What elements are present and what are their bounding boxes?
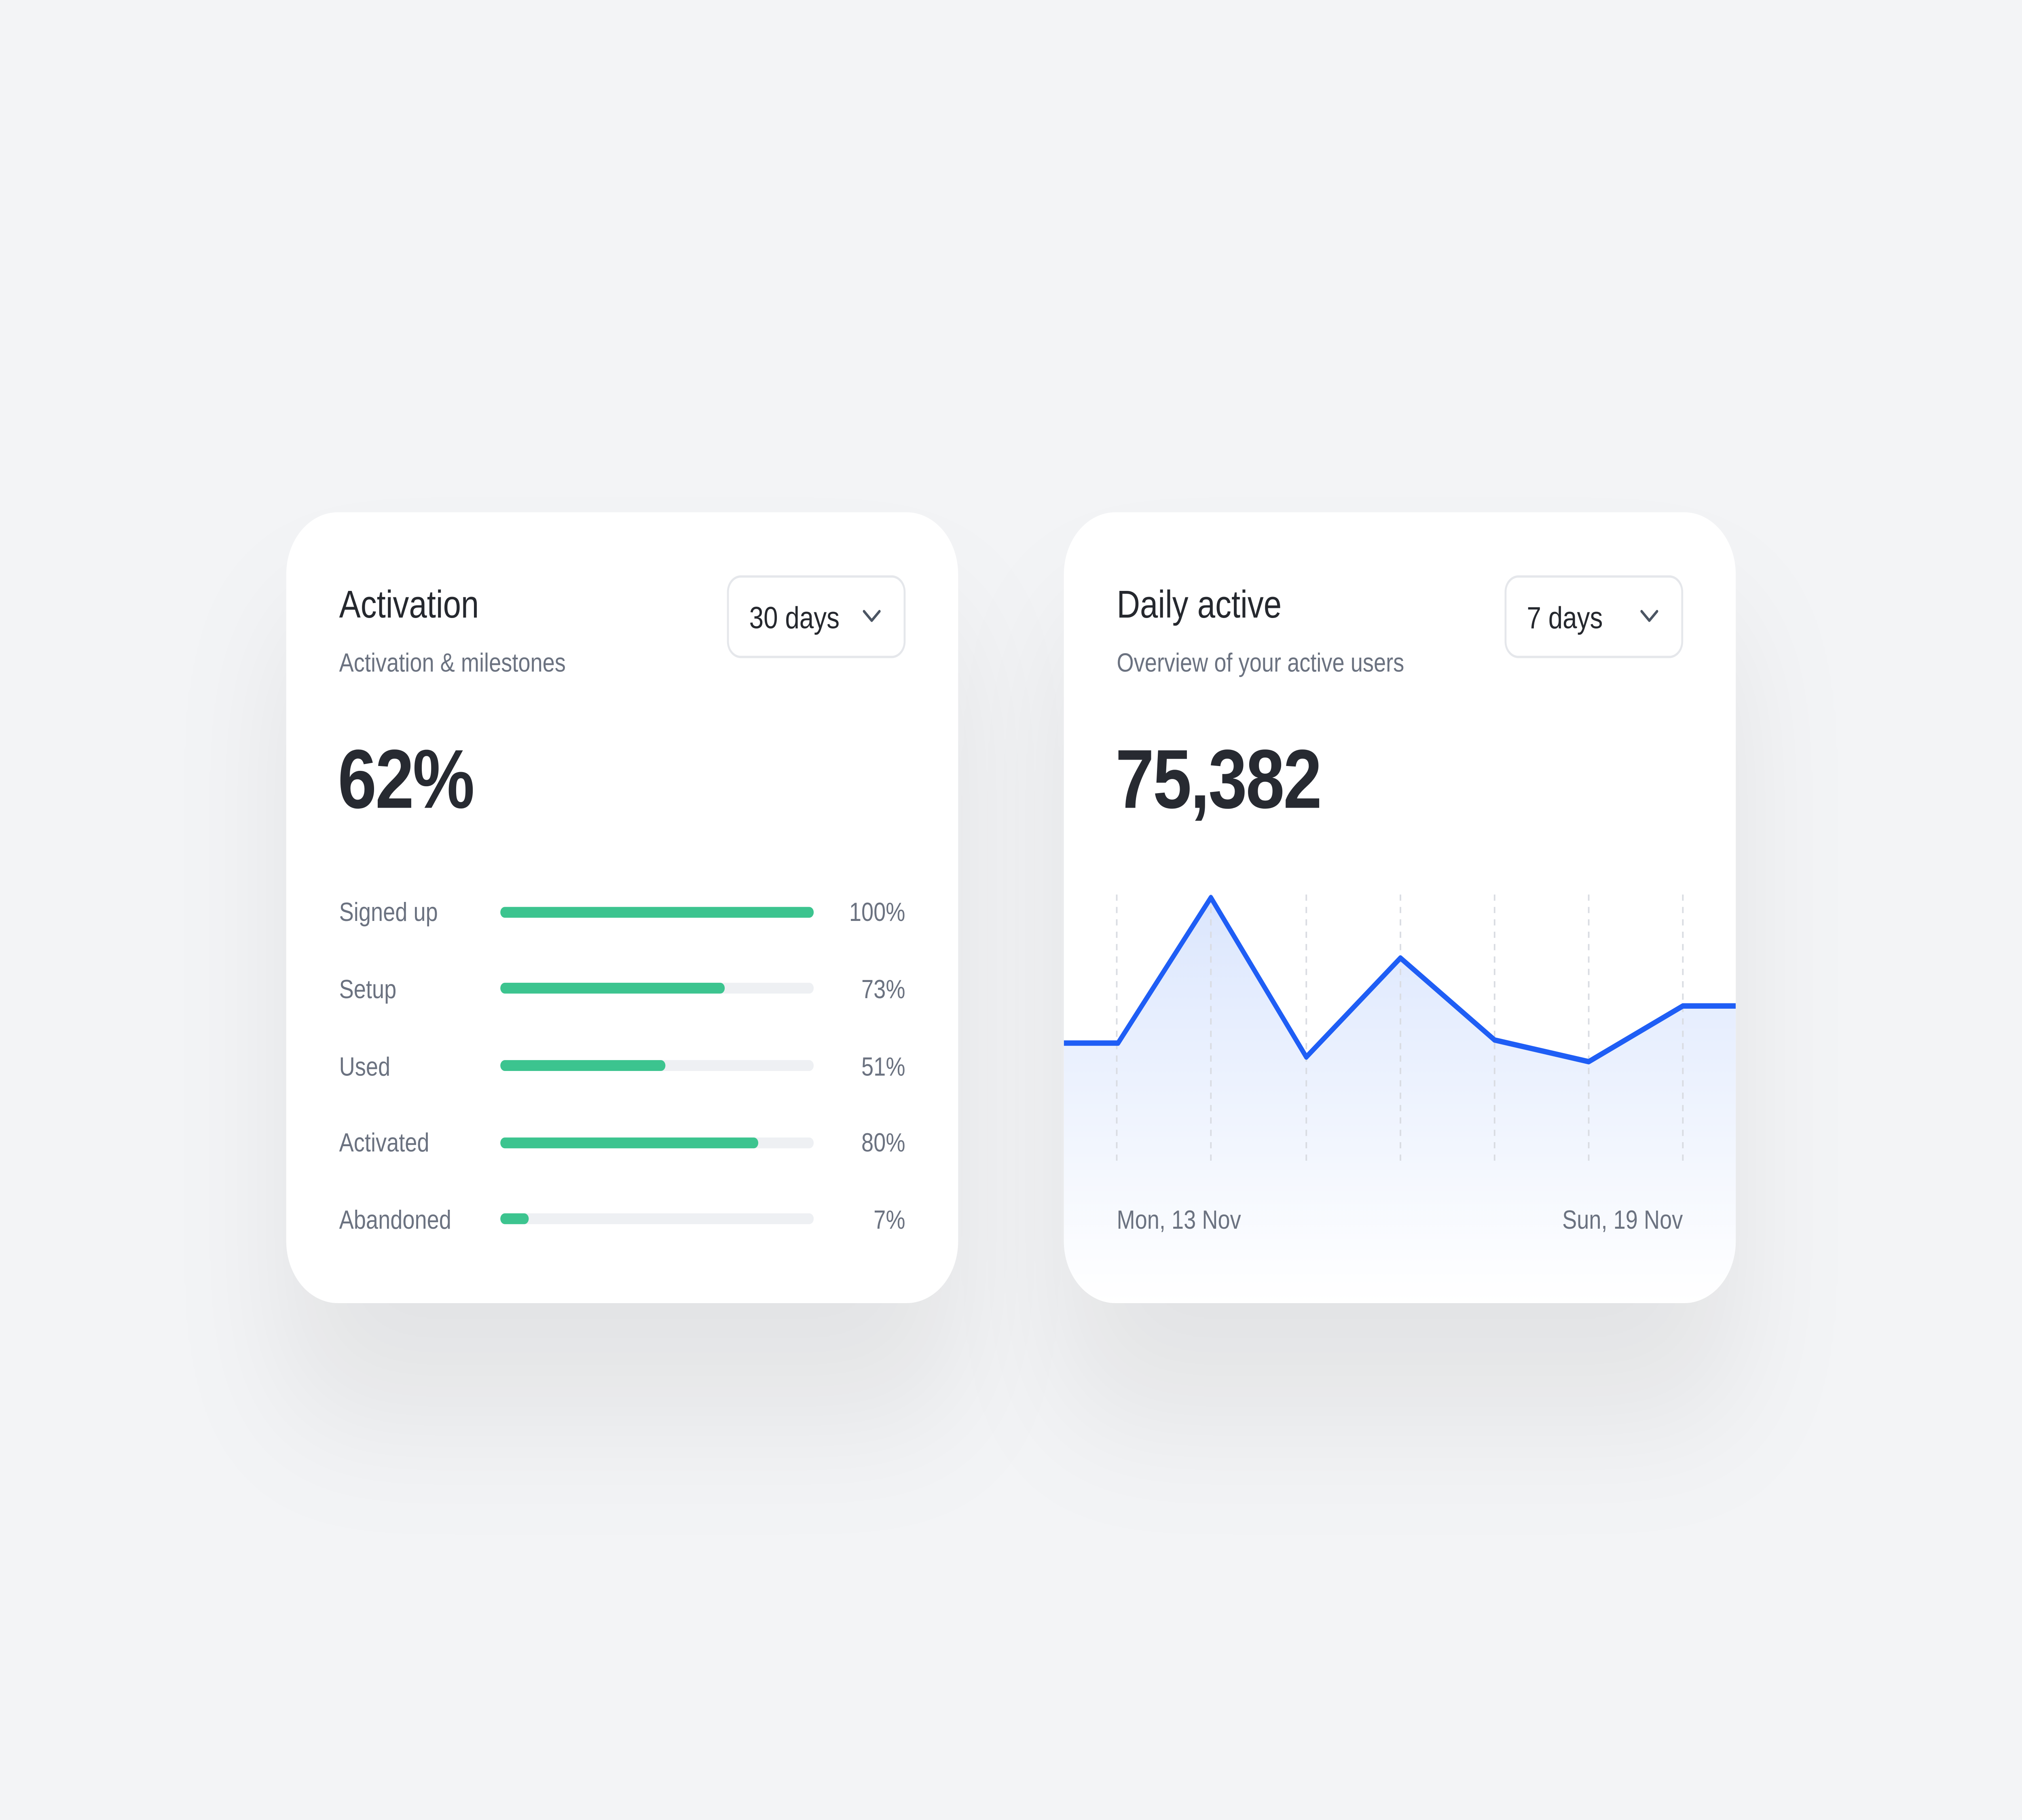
subtitle: Overview of your active users — [1117, 648, 1404, 677]
big number: 75,382 — [1115, 733, 1321, 826]
row: used — [339, 1052, 905, 1081]
row: activated: 80% — [861, 1128, 905, 1157]
dropdown: 30 days — [728, 576, 905, 657]
title: Activation — [339, 582, 479, 626]
big number: 62% — [338, 733, 474, 826]
row: abandoned: 7% — [874, 1205, 905, 1234]
row: used: 51% — [861, 1052, 905, 1081]
row: setup — [339, 974, 905, 1004]
row: setup: 73% — [861, 974, 905, 1004]
panel: activation — [286, 512, 958, 1303]
row: signed up — [339, 897, 905, 927]
panel: daily active — [1064, 512, 1736, 1303]
row: signed up: Signed up — [339, 897, 438, 927]
row: used: Used — [339, 1052, 390, 1081]
row: setup: Setup — [339, 974, 396, 1004]
row: signed up: 100% — [849, 897, 905, 927]
row: activated — [339, 1128, 905, 1157]
line chart — [1064, 895, 1736, 1205]
dropdown: 7 days: 7 days — [1527, 600, 1603, 635]
title: Daily active — [1117, 582, 1282, 626]
subtitle: Activation & milestones — [339, 648, 566, 677]
dropdown: 30 days: 30 days — [749, 600, 840, 635]
row: abandoned: Abandoned — [339, 1205, 451, 1234]
date end: Sun, 19 Nov — [1562, 1205, 1683, 1234]
dropdown: 7 days — [1506, 576, 1682, 657]
row: abandoned — [339, 1205, 905, 1234]
row: activated: Activated — [339, 1128, 429, 1157]
date start: Mon, 13 Nov — [1117, 1205, 1241, 1234]
